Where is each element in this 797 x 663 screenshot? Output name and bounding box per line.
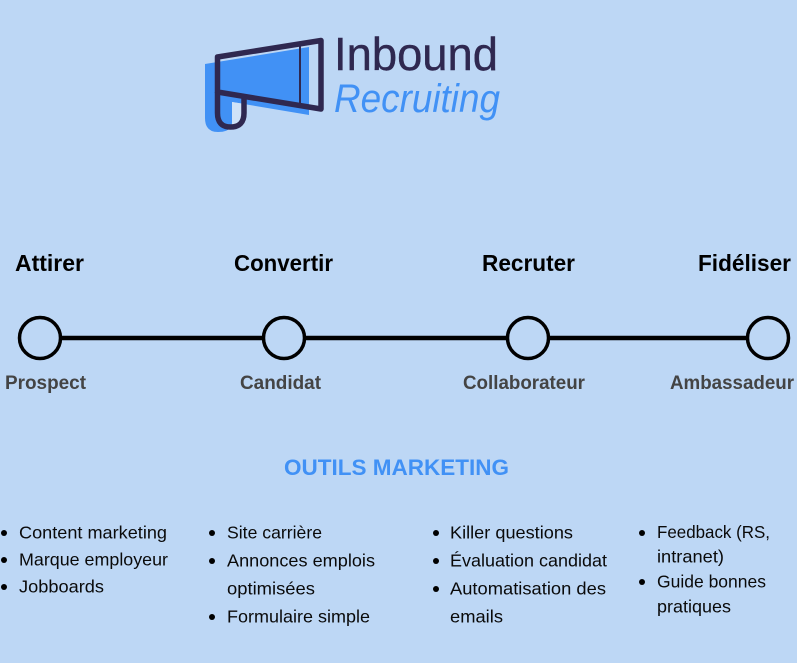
list: Attirer tools: Content marketing [19, 522, 167, 542]
icon: megaphone [205, 40, 321, 132]
heading: Recruter: Recruter [482, 250, 575, 276]
heading: Attirer: Attirer [15, 250, 84, 276]
list: Recruter tools [433, 522, 607, 626]
label: Collaborateur: Collaborateur [463, 373, 586, 394]
label: Ambassadeur: Ambassadeur [670, 373, 795, 394]
timeline node: Fidéliser [748, 318, 788, 358]
label: Candidat: Candidat [240, 373, 322, 394]
list: Attirer tools [1, 522, 168, 596]
timeline node: Attirer [20, 318, 60, 358]
list: Fidéliser tools: Guide bonnes [657, 572, 766, 592]
list: Recruter tools: Évaluation candidat [450, 550, 607, 570]
list: Recruter tools: emails [450, 606, 503, 626]
list: Fidéliser tools [639, 522, 770, 616]
wordmark: Recruiting: Recruiting [334, 77, 500, 121]
logo [205, 28, 500, 132]
heading: Convertir: Convertir [234, 250, 333, 276]
list: Convertir tools: Formulaire simple [227, 606, 370, 626]
list: Convertir tools [209, 522, 375, 626]
section heading: Outils marketing: OUTILS MARKETING [284, 455, 509, 480]
timeline node: Recruter [508, 318, 548, 358]
list: Attirer tools: Jobboards [19, 576, 104, 596]
label: Prospect: Prospect [5, 373, 87, 394]
list: Recruter tools: Automatisation des [450, 578, 606, 598]
list: Attirer tools: Marque employeur [19, 550, 168, 570]
timeline node: Convertir [264, 318, 304, 358]
timeline [20, 318, 788, 358]
list: Fidéliser tools: Feedback (RS, [657, 522, 770, 542]
heading: Fidéliser: Fidéliser [698, 250, 791, 276]
stage headings [15, 250, 791, 276]
list: Convertir tools: Site carrière [227, 522, 322, 542]
list: Recruter tools: Killer questions [450, 522, 573, 542]
list: Fidéliser tools: intranet) [657, 546, 724, 566]
list: Convertir tools: optimisées [227, 578, 315, 598]
wordmark: Inbound: Inbound [334, 28, 498, 80]
list: Convertir tools: Annonces emplois [227, 550, 375, 570]
stage labels [5, 373, 795, 394]
list: Fidéliser tools: pratiques [657, 596, 731, 616]
